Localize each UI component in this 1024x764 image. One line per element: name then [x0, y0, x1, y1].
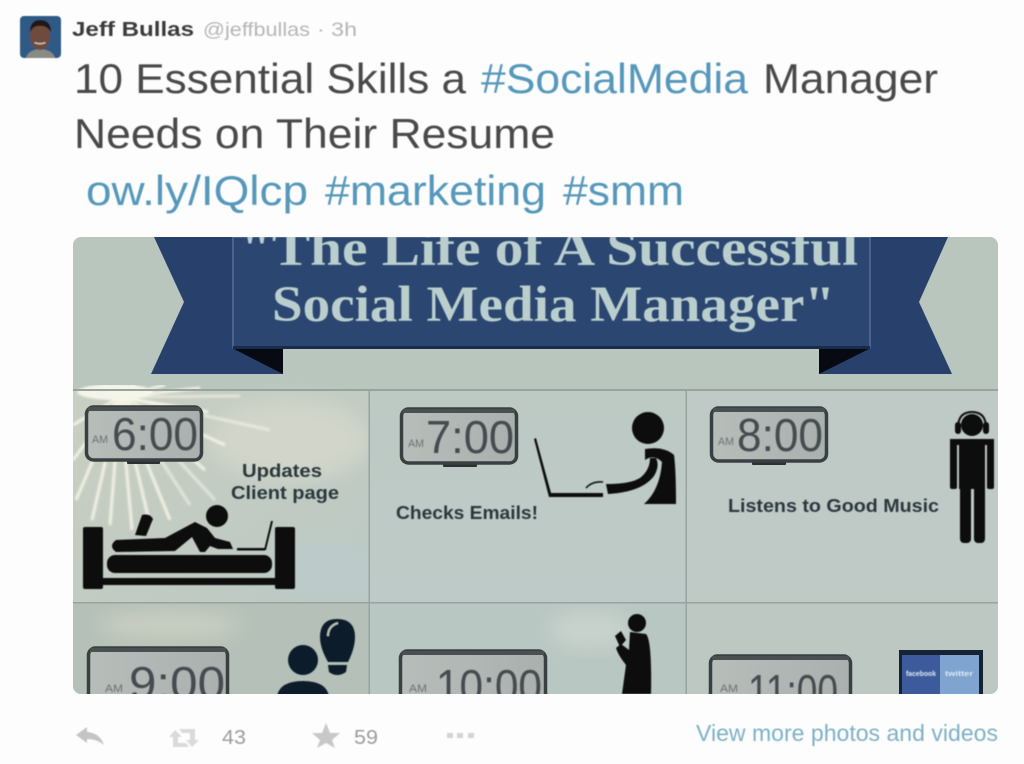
tweet author line: · 3h	[317, 19, 357, 41]
link: view more photos and videos: View more photos and videos	[696, 720, 998, 746]
icon: man smoking	[615, 614, 651, 694]
tweet text: ow.ly/IQlcp	[86, 167, 308, 214]
clock 7:00: AM	[408, 438, 424, 450]
tweet text	[74, 55, 938, 214]
label: updates client page: Updates	[242, 460, 322, 481]
clock 11:00	[708, 654, 852, 694]
tweet text: Manager	[763, 55, 938, 102]
icon: retweet	[169, 729, 199, 747]
clock 9:00: 9:00	[129, 657, 225, 709]
label: listens to good music: Listens to Good Music	[728, 495, 939, 516]
panel: 7:00 checks emails	[369, 390, 686, 602]
infographic image	[73, 221, 998, 717]
clock 10:00	[398, 649, 548, 694]
icon: tablet with social pages	[899, 650, 983, 696]
label: checks emails: Checks Emails!	[396, 502, 538, 523]
panel: 6:00 updates client page	[73, 378, 390, 602]
clock 8:00: AM	[718, 436, 734, 448]
label: updates client page	[231, 460, 339, 503]
icon: tablet with social pages: facebook	[906, 671, 936, 678]
clock 6:00: AM	[92, 434, 108, 446]
banner	[151, 237, 952, 374]
avatar: Jeff Bullas	[20, 16, 61, 58]
banner: Social Media Manager"	[272, 277, 835, 333]
clock 7:00: 7:00	[426, 411, 514, 463]
clock 11:00: AM	[720, 683, 738, 695]
panel: 10:00 break	[398, 610, 652, 694]
icon: person at laptop	[534, 412, 676, 504]
tweet author line	[72, 18, 357, 41]
panel: 8:00 listens to good music	[686, 390, 998, 602]
clock 6:00: 6:00	[112, 408, 198, 460]
banner: "The Life of A Successful	[240, 221, 858, 277]
icon: favorite star	[312, 723, 340, 748]
favorite count: 59	[354, 727, 378, 749]
icon: tablet with social pages: twitter	[945, 671, 973, 678]
tweet author line: @jeffbullas	[203, 19, 310, 41]
tweet text: #marketing	[325, 167, 546, 214]
icon: reply	[76, 727, 104, 745]
tweet author line: Jeff Bullas	[72, 18, 194, 41]
panel: 11:00 social networks	[708, 650, 998, 694]
clock 8:00: 8:00	[737, 409, 823, 461]
clock 10:00: 10:00	[436, 660, 542, 712]
icon: person with headphones	[950, 412, 994, 543]
label: updates client page: Client page	[231, 482, 339, 503]
icon: person on sofa with laptop	[83, 505, 295, 589]
tweet text: 10 Essential Skills a	[74, 55, 467, 102]
panel: 9:00 idea	[73, 604, 358, 694]
clock 9:00	[86, 646, 230, 694]
clock 7:00	[402, 409, 516, 467]
tweet text: #SocialMedia	[481, 55, 749, 102]
icon: person with light bulb	[277, 619, 355, 696]
clock 10:00: AM	[409, 683, 427, 695]
icon: more	[447, 733, 474, 738]
sun rays	[73, 378, 270, 530]
clock 9:00: AM	[105, 683, 123, 695]
retweet count: 43	[222, 727, 246, 749]
clock 11:00: 11:00	[748, 665, 838, 717]
tweet actions	[76, 723, 474, 749]
tweet text: #smm	[563, 167, 684, 214]
tweet text: Needs on Their Resume	[74, 110, 555, 157]
